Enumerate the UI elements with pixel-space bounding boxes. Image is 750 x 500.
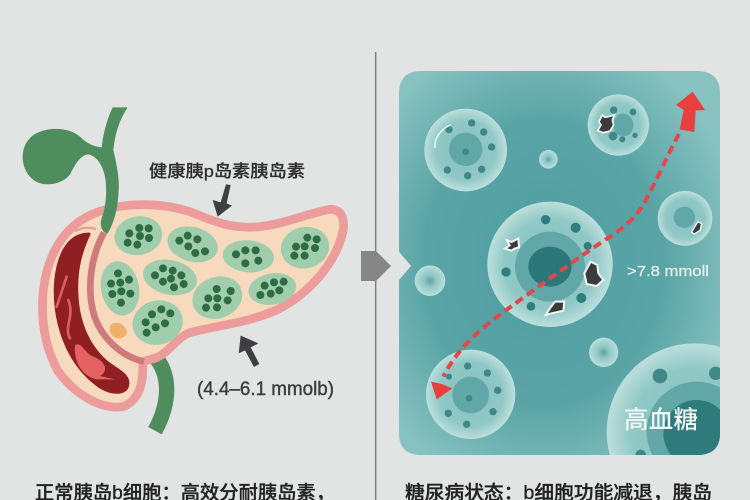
cell: right <box>658 191 712 246</box>
dashed trend arrow <box>431 92 705 399</box>
panel background <box>399 71 720 455</box>
label: high blood sugar: 高血糖 <box>624 406 698 434</box>
icon: bottom duct <box>155 357 167 431</box>
lumen red fold <box>75 344 115 379</box>
panel: healthy pancreas <box>23 107 344 431</box>
stomach wall <box>90 233 144 362</box>
cell: central damaged <box>487 202 613 327</box>
islets <box>97 212 333 350</box>
pancreas body <box>42 205 344 407</box>
label: normal glucose range: (4.4–6.1 mmolb) <box>197 379 334 400</box>
cell: top left <box>424 109 507 191</box>
panel: diabetic cells <box>399 71 720 455</box>
arrow: centre transition <box>361 251 391 281</box>
lining arc <box>75 228 96 231</box>
cell: small lower <box>589 338 618 367</box>
damage blob <box>598 115 614 133</box>
label: high glucose value: >7.8 mmoll <box>627 264 709 280</box>
divider line <box>375 52 376 500</box>
cell: bottom left <box>426 350 515 439</box>
islet cells <box>107 224 321 337</box>
arrowhead down <box>431 382 452 399</box>
arrow: to pancreas top <box>213 184 232 217</box>
arrowhead up <box>676 92 705 132</box>
lumen folds <box>57 277 70 338</box>
arrow: to pancreas bottom <box>239 336 259 367</box>
label: healthy insulin: 健康胰p岛素胰岛素 <box>149 161 305 181</box>
cell: small top <box>539 150 558 169</box>
cell: large bottom right <box>606 343 720 455</box>
damage blobs <box>505 238 603 315</box>
cell: small left <box>415 265 445 296</box>
duodenum lumen <box>54 233 129 394</box>
icon: gallbladder and bile duct <box>23 107 128 234</box>
cell: top right damaged <box>588 94 649 156</box>
orange spot <box>110 323 127 338</box>
